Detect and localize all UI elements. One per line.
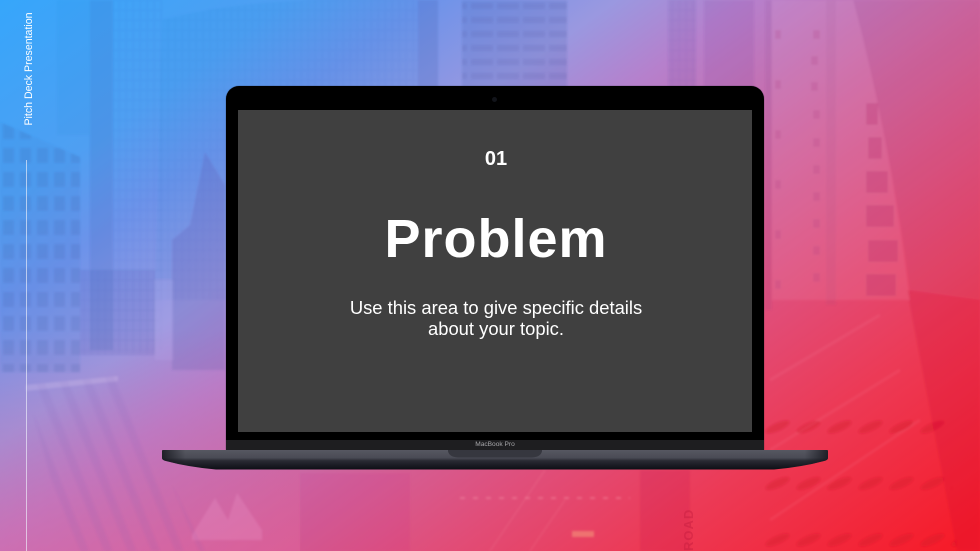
road lettering in photo: ROAD: [681, 509, 696, 551]
laptop: MacBook Pro: [162, 85, 828, 470]
section number: 01: [485, 148, 507, 170]
description text: [350, 297, 642, 339]
bottom bezel strip: [226, 440, 764, 450]
laptop base: [162, 450, 828, 470]
heading: Problem: Problem: [384, 209, 608, 269]
laptop lid and bezel: [226, 86, 764, 450]
trackpad notch: [448, 450, 542, 458]
screen: [238, 110, 752, 432]
vertical accent line: [26, 160, 27, 551]
camera: [492, 97, 497, 102]
description text: Use this area to give specific details: [350, 297, 642, 318]
model label: MacBook Pro: [475, 441, 515, 448]
description text: about your topic.: [428, 318, 564, 339]
side label: Pitch Deck Presentation: Pitch Deck Presentation: [23, 12, 35, 126]
